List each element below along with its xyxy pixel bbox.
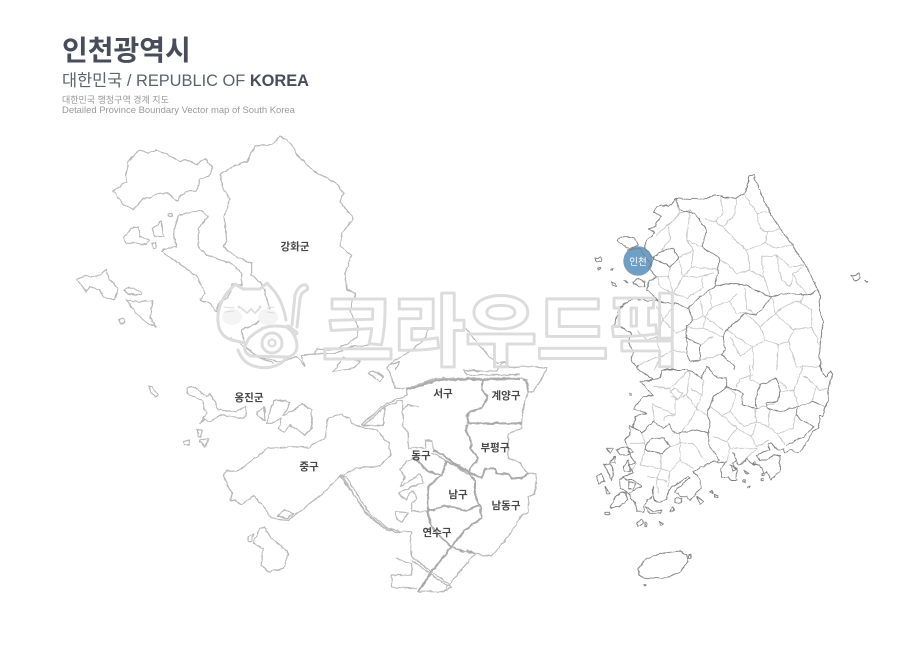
district labels: 연수구 [423,526,452,539]
Korea north half [595,175,867,370]
Korea boundary lines [595,175,867,587]
district labels: 서구 [433,387,453,400]
watermark cat mascot [218,283,308,368]
watermark wordmark: 크라우드픽 [322,270,680,382]
district labels: 남구 [448,488,468,501]
heading block [62,35,309,116]
description korean: 대한민국 행정구역 경계 지도 [62,95,169,105]
map: Incheon districts [77,136,547,592]
district labels: 옹진군 [235,392,264,404]
district labels: 동구 [411,450,431,462]
highlight label: 인천 [629,257,647,268]
Ganghwa and northern islands [77,136,358,363]
description english: Detailed Province Boundary Vector map of South Korea [62,105,295,116]
district labels [235,240,521,539]
district labels: 중구 [299,461,319,473]
Yeongjong and western islands [148,338,400,572]
Korea south half [597,365,833,587]
Incheon boundary lines [77,136,547,592]
map: South Korea [595,175,867,587]
district labels: 남동구 [492,499,521,512]
district labels: 계양구 [492,389,521,402]
watermark [218,270,680,382]
district labels: 강화군 [281,240,310,253]
district labels: 부평구 [481,442,510,454]
title: 인천광역시 [62,35,191,66]
highlight marker: Incheon [623,246,653,276]
subtitle: 대한민국 / REPUBLIC OF KOREA [62,72,309,90]
Incheon mainland and districts [340,328,547,592]
